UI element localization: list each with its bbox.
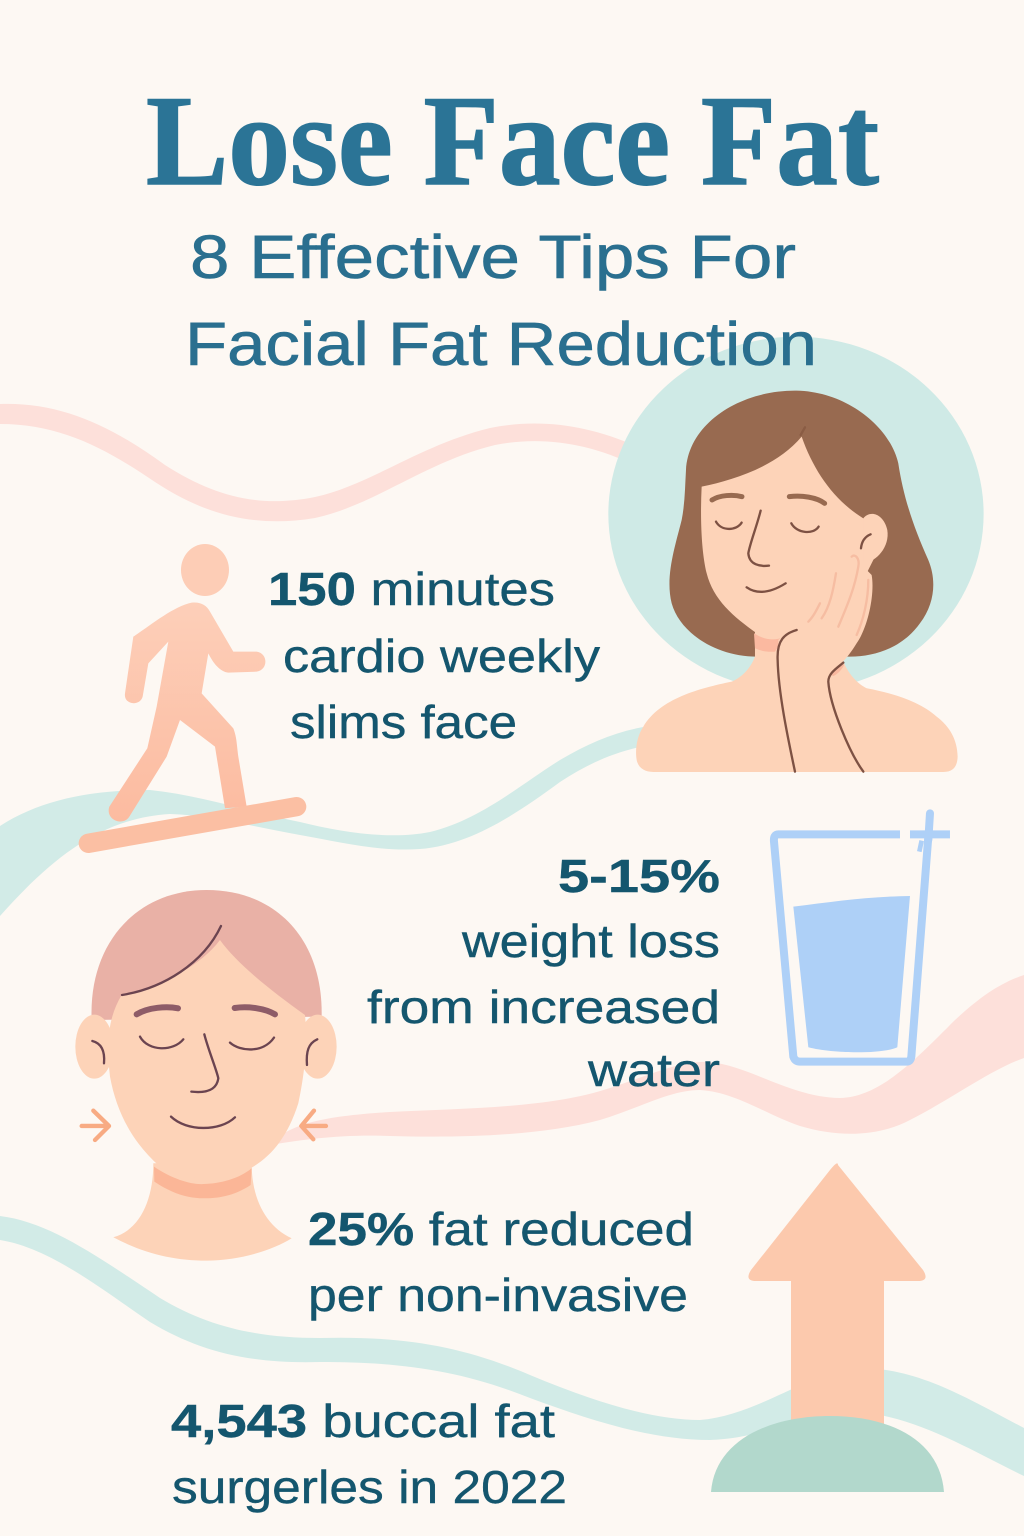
stat: non-invasive [308, 1203, 694, 1321]
stat: buccal fat: 4,543 buccal fat [171, 1395, 555, 1447]
neck and shoulders [636, 630, 958, 772]
stat: cardio: 150 minutes [268, 563, 555, 615]
ear [863, 514, 888, 563]
stat: water [367, 850, 720, 1096]
stat: cardio: cardio weekly [283, 630, 600, 682]
wave: lower teal [0, 1216, 1024, 1476]
stat: water: 5-15% [558, 850, 720, 902]
hand [778, 554, 872, 687]
water [793, 896, 910, 1052]
wave: upper teal [0, 726, 650, 916]
stat: buccal fat [171, 1395, 567, 1513]
stat: non-invasive: per non-invasive [308, 1269, 688, 1321]
compress arrows [82, 1111, 326, 1140]
neck and chest [113, 1163, 292, 1261]
stat: cardio [268, 563, 600, 748]
subtitle: 8 Effective Tips For [190, 223, 796, 291]
mound [711, 1416, 944, 1492]
stat: cardio: slims face [290, 696, 517, 748]
arrow [748, 1163, 926, 1425]
icon: walking figure on board [88, 544, 297, 843]
glass outline [774, 813, 950, 1062]
neck shadow [754, 633, 785, 652]
subtitle [185, 223, 817, 378]
subtitle: Facial Fat Reduction [185, 310, 817, 378]
body [109, 602, 265, 821]
stat: water: weight loss [461, 915, 720, 967]
ears [75, 1015, 337, 1079]
stat: buccal fat: surgerles in 2022 [172, 1461, 567, 1513]
icon: woman with hand on cheek [608, 337, 984, 772]
face [108, 940, 306, 1179]
stat: water: water [587, 1044, 720, 1096]
hair [669, 391, 933, 657]
finger creases [808, 556, 868, 635]
head [181, 544, 229, 596]
teal circle backdrop [608, 337, 984, 691]
line art [92, 926, 317, 1128]
facial line art [716, 427, 871, 772]
icon: glass of water [774, 813, 950, 1062]
stat: non-invasive: 25% fat reduced [308, 1203, 694, 1255]
title: Lose Face Fat [146, 69, 879, 212]
collar shadow [154, 1167, 252, 1198]
icon: upward arrow on mound [711, 1163, 944, 1492]
eyebrows [137, 1007, 275, 1014]
wrist shadow [829, 662, 844, 676]
eyebrows [712, 495, 825, 503]
wave: middle pink [270, 975, 1024, 1145]
hair [92, 890, 322, 1020]
stat: water: from increased [367, 981, 720, 1033]
icon: man's face with arrows [75, 890, 337, 1261]
wave: top pink [0, 404, 640, 521]
board [88, 807, 297, 843]
face [701, 437, 877, 638]
